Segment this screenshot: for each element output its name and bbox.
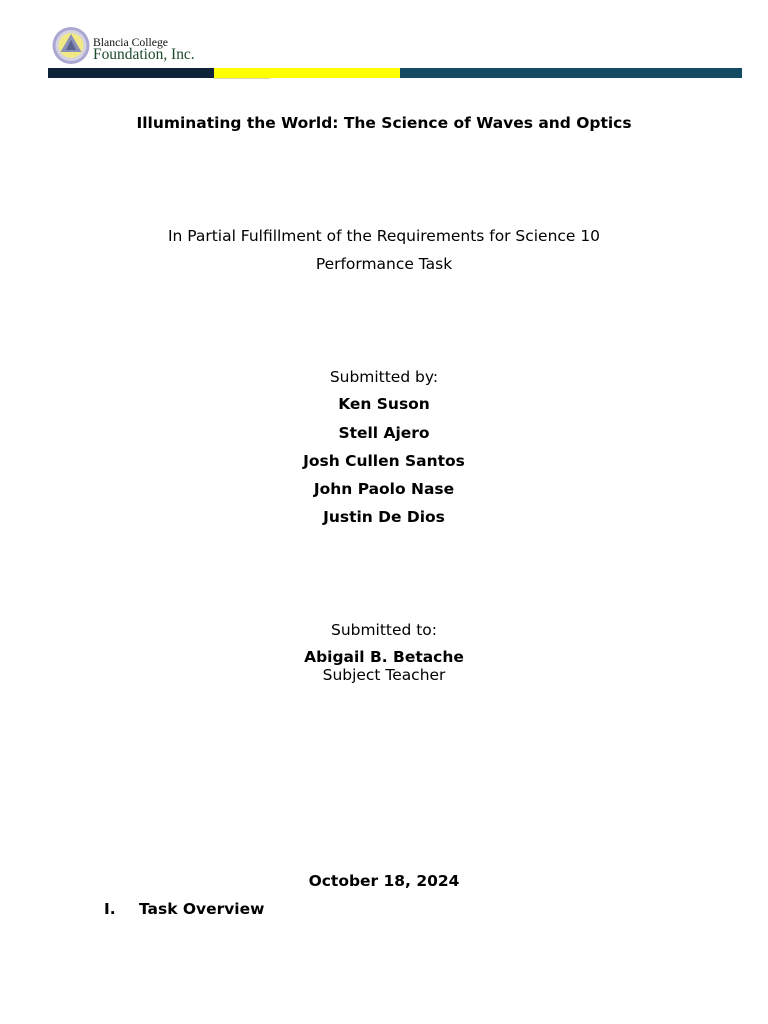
text: task type: Performance Task [316,255,452,273]
text block: submitted by: Ken Suson [338,395,430,413]
section heading: task overview: Task Overview [139,900,264,918]
text block: submitted to: Abigail B. Betache [304,648,464,666]
text block: submitted to: Submitted to: [331,620,437,638]
date: October 18, 2024 [309,872,459,890]
text block: submitted by [302,368,465,526]
text block: submitted by: Submitted by: [330,368,438,386]
text block: submitted by: John Paolo Nase [314,480,454,498]
logo text: school name: Blancia College [93,36,168,49]
logo: Blancia College seal [52,27,90,64]
text block: submitted to [304,620,464,684]
logo text: school name: Foundation, Inc. [93,46,195,63]
text block: submitted to: Subject Teacher [323,666,445,684]
text block: submitted by: Justin De Dios [323,508,445,526]
text block: submitted by: Josh Cullen Santos [303,452,465,470]
text block: submitted by: Stell Ajero [338,424,430,442]
header colour bar [48,68,742,79]
section heading: task overview: I. [104,900,116,918]
logo text: school name [93,36,195,63]
text: purpose line: In Partial Fulfillment of the Requirements for Science 10 [168,226,600,244]
title: Illuminating the World: The Science of Waves and Optics [136,114,632,132]
